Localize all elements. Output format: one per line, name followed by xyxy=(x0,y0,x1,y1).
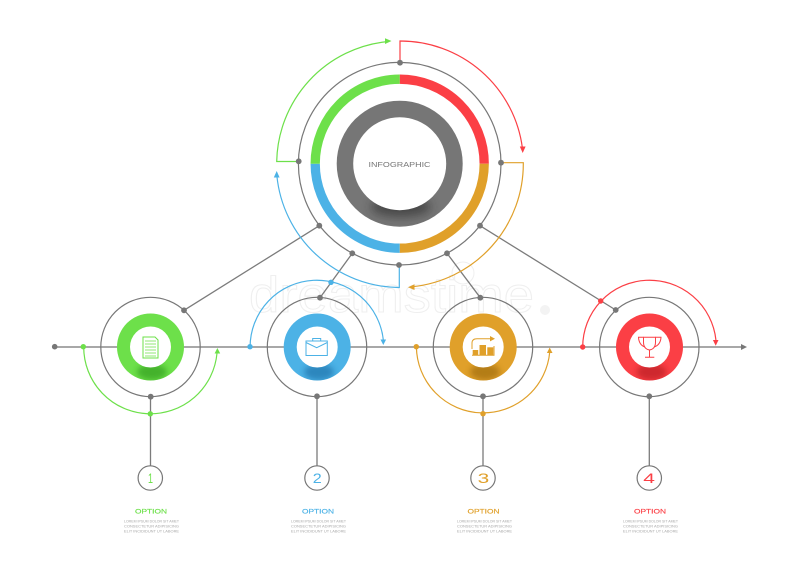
option 4 heading: OPTION xyxy=(634,508,666,516)
option 1 stem xyxy=(150,397,152,466)
option 2 body text: CONSECTETUR ADIPISICING xyxy=(291,524,346,528)
hub segment: blue xyxy=(315,164,400,248)
option 4 shadow xyxy=(636,364,666,380)
timeline axis with arrow xyxy=(52,344,747,350)
central hub xyxy=(298,62,501,265)
hub grey disc xyxy=(337,101,463,227)
hub segment: green xyxy=(315,79,400,164)
option 1 colored disc xyxy=(117,314,184,380)
hub arc: green xyxy=(277,38,392,162)
option 4 body text: ELIT INCIDIDUNT UT LABORE xyxy=(623,528,678,534)
hub connection nodes xyxy=(296,60,504,268)
option 3 colored disc xyxy=(450,314,517,380)
option 1 xyxy=(81,297,220,534)
option 4 white disc xyxy=(629,326,670,368)
icon: briefcase xyxy=(306,338,327,356)
option 3 outer ring xyxy=(433,297,533,397)
option 1 number badge xyxy=(138,466,162,490)
option 2 heading: OPTION xyxy=(302,508,334,516)
option 1 body text: ELIT INCIDIDUNT UT LABORE xyxy=(124,528,179,534)
icon: bar chart with arrow xyxy=(472,336,495,355)
option 2 shadow xyxy=(304,364,334,380)
hub segment: orange xyxy=(400,164,484,248)
option 3 nodes xyxy=(477,295,486,399)
option 2 body text: ELIT INCIDIDUNT UT LABORE xyxy=(291,528,346,534)
option 1 body text: CONSECTETUR ADIPISICING xyxy=(124,524,179,528)
option 3 body text xyxy=(457,518,512,534)
option 1 body text xyxy=(124,518,179,534)
option 3 body text: LOREM IPSUM DOLOR SIT AMET xyxy=(457,518,512,524)
option 1 nodes xyxy=(148,307,187,400)
hub white disc xyxy=(353,117,446,210)
option 3 heading: OPTION xyxy=(468,508,500,516)
connector lines from hub to options xyxy=(184,226,616,310)
option 3 shadow xyxy=(470,364,500,380)
option 2 arc xyxy=(247,280,386,349)
option 1 shadow xyxy=(137,364,167,380)
option 3 arc xyxy=(414,344,552,416)
option 3 number badge: 3 xyxy=(478,470,490,486)
option 4 arc xyxy=(580,280,718,350)
option 2 outer ring xyxy=(267,297,367,397)
option 2 body text xyxy=(291,518,346,534)
option 3 body text: ELIT INCIDIDUNT UT LABORE xyxy=(457,528,512,534)
hub title: INFOGRAPHIC xyxy=(368,160,430,169)
option 3 body text: CONSECTETUR ADIPISICING xyxy=(457,524,512,528)
hub arc: red xyxy=(400,41,526,153)
option 2 body text: LOREM IPSUM DOLOR SIT AMET xyxy=(291,518,346,524)
hub outer ring xyxy=(298,62,501,265)
hub segment: red xyxy=(400,79,484,164)
option 2 number badge: 2 xyxy=(313,470,322,486)
option 2 white disc xyxy=(297,326,338,368)
option 3 stem xyxy=(482,397,484,466)
icon: trophy xyxy=(638,337,661,357)
option 2 colored disc xyxy=(284,314,351,380)
option 4 body text: CONSECTETUR ADIPISICING xyxy=(623,524,678,528)
option 1 arc xyxy=(81,344,220,416)
option 2 nodes xyxy=(314,295,323,399)
hub arc: orange xyxy=(408,163,523,290)
option 1 outer ring xyxy=(101,297,200,397)
option 4 stem xyxy=(648,397,650,466)
option 2 number badge xyxy=(305,466,329,490)
option 1 body text: LOREM IPSUM DOLOR SIT AMET xyxy=(124,518,179,524)
option 4 body text xyxy=(623,518,678,534)
watermark: dreamstime xyxy=(249,267,534,323)
option 1 white disc xyxy=(130,326,171,368)
icon: document xyxy=(143,337,158,358)
option 4 xyxy=(580,280,718,534)
option 4 number badge xyxy=(637,466,662,490)
hub shadow xyxy=(371,197,431,217)
option 1 heading: OPTION xyxy=(135,508,167,516)
option 4 colored disc xyxy=(616,314,683,380)
option 3 xyxy=(414,295,552,534)
option 2 xyxy=(247,280,386,534)
option 4 number badge: 4 xyxy=(643,470,655,486)
option 4 outer ring xyxy=(600,297,699,397)
option 3 white disc xyxy=(463,326,504,368)
hub arc: blue xyxy=(274,171,399,288)
option 4 body text: LOREM IPSUM DOLOR SIT AMET xyxy=(623,518,678,524)
option 3 number badge xyxy=(471,466,495,490)
option 2 stem xyxy=(316,397,318,466)
option 4 nodes xyxy=(613,307,652,399)
option 1 number badge: 1 xyxy=(148,470,153,486)
